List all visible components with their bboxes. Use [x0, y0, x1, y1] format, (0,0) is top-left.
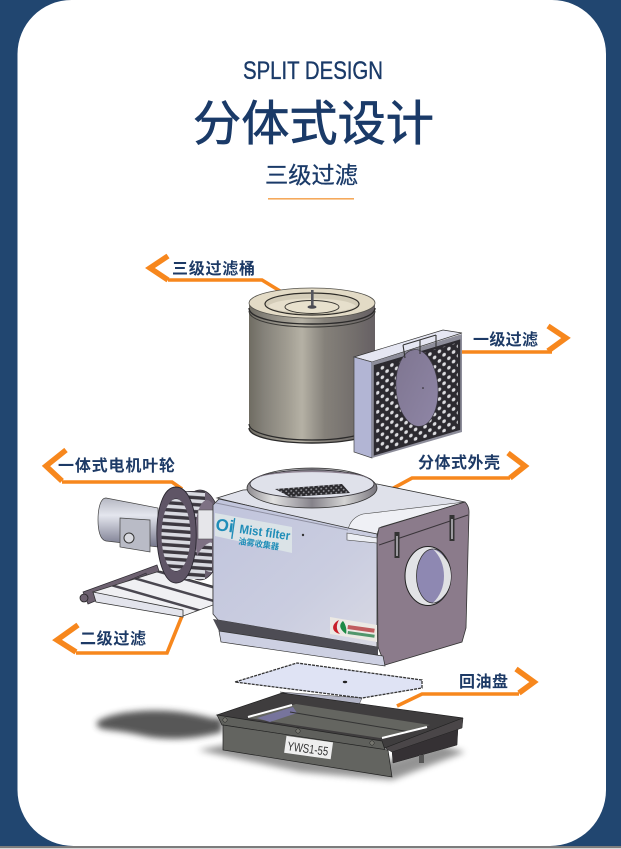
icon: third-stage filter cylinder — [249, 288, 375, 443]
callout: 一级过滤 — [462, 326, 566, 352]
logo: Oil Mist filter label: 油雾收集器 — [238, 536, 280, 552]
icon: top collar ring — [247, 468, 377, 508]
latches — [397, 515, 452, 558]
nameplate: YWS1-55 — [287, 739, 329, 759]
callout: 一体式电机叶轮: 一体式电机叶轮 — [58, 457, 175, 475]
logo: green red brand mark — [330, 617, 377, 642]
bottom grey edge — [0, 846, 621, 849]
orange underline — [268, 198, 354, 200]
shadow under base tray — [97, 710, 465, 780]
callout: 二级过滤 — [57, 616, 182, 653]
callout: 回油盘 — [397, 669, 534, 706]
lid edge — [216, 503, 348, 530]
logo: Oil Mist filter label — [214, 513, 292, 553]
callout: 一体式电机叶轮 — [46, 450, 182, 489]
callout: 回油盘: 回油盘 — [459, 672, 508, 691]
icon: second-stage tray with bracket — [80, 565, 213, 617]
side face — [377, 502, 469, 665]
icon: oil return pan — [217, 693, 463, 777]
logo: Oil Mist filter label: Mist filter — [239, 522, 291, 543]
subtitle: 三级过滤 — [265, 162, 358, 188]
callout: 三级过滤桶: 三级过滤桶 — [172, 259, 255, 278]
callout: 二级过滤: 二级过滤 — [80, 629, 146, 648]
nameplate — [284, 736, 333, 759]
top face — [217, 484, 465, 530]
logo: Oil Mist filter label: Oi — [214, 515, 235, 536]
icon: motor — [98, 498, 158, 552]
bottom flange — [219, 631, 385, 666]
icon: impeller fan — [157, 487, 222, 583]
white lid corner — [348, 502, 465, 538]
callout: 三级过滤桶 — [150, 256, 280, 291]
front face — [213, 499, 377, 647]
icon: main housing — [213, 484, 469, 666]
callout: 一级过滤: 一级过滤 — [473, 330, 538, 349]
icon: first-stage mesh filter — [354, 330, 462, 458]
dark band — [213, 619, 378, 656]
callout: 分体式外壳: 分体式外壳 — [418, 453, 500, 472]
heading: chinese title: 分体式设计 — [193, 98, 434, 151]
side port — [405, 546, 451, 606]
icon: drip plate — [235, 663, 422, 707]
callout: 分体式外壳 — [390, 453, 525, 490]
heading: english title: SPLIT DESIGN — [243, 57, 383, 85]
